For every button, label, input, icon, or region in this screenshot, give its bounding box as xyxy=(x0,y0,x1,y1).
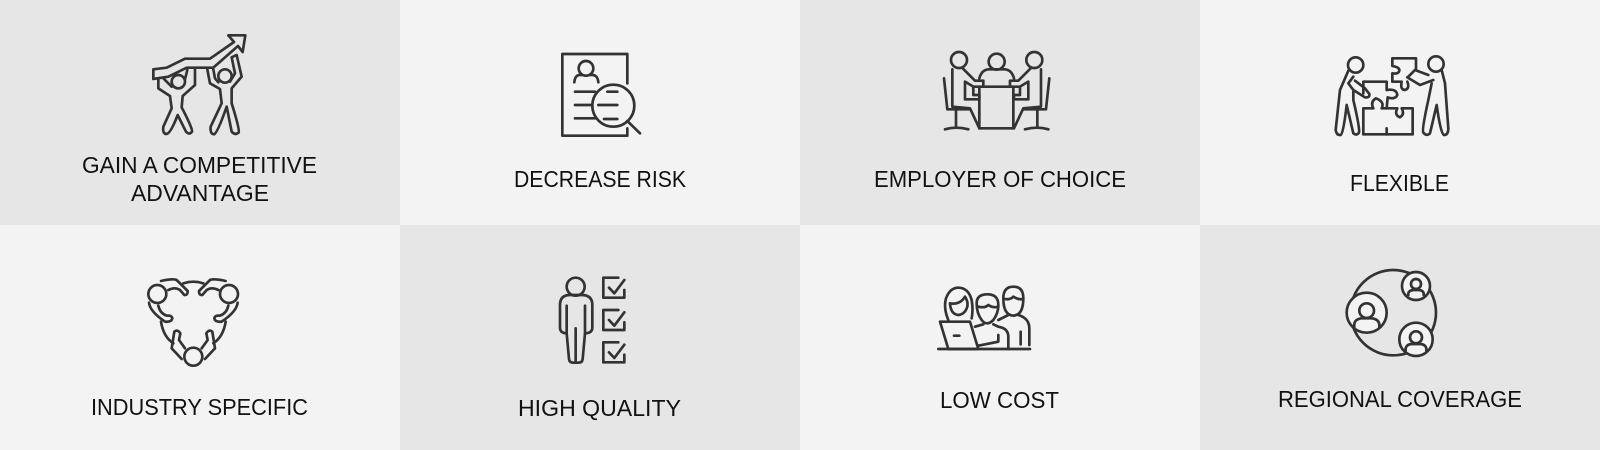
icon: document with magnifying glass xyxy=(562,54,640,136)
icon: three people meeting at a table xyxy=(944,52,1049,129)
panel: decrease risk xyxy=(400,0,800,225)
label: industry specific: INDUSTRY SPECIFIC xyxy=(91,394,308,420)
icon: three people around a circle, top view xyxy=(148,279,238,366)
panel: flexible xyxy=(1200,0,1600,225)
label: high quality: HIGH QUALITY xyxy=(518,395,681,421)
label: decrease risk: DECREASE RISK xyxy=(514,166,687,192)
panel: regional coverage xyxy=(1200,225,1600,450)
label: flexible: FLEXIBLE xyxy=(1350,170,1449,196)
panel: low cost xyxy=(800,225,1200,450)
panel: high quality xyxy=(400,225,800,450)
panel: employer of choice xyxy=(800,0,1200,225)
icon: connected people on a circle xyxy=(1347,270,1436,356)
label: gain a competitive advantage: ADVANTAGE xyxy=(131,180,269,206)
label: low cost: LOW COST xyxy=(940,387,1059,413)
icon: two people assembling puzzle xyxy=(1336,56,1448,135)
label: regional coverage: REGIONAL COVERAGE xyxy=(1278,386,1522,412)
icon: person with checklist xyxy=(560,278,624,363)
label: employer of choice: EMPLOYER OF CHOICE xyxy=(874,166,1126,192)
label: gain a competitive advantage: GAIN A COMPETITIVE xyxy=(82,152,317,178)
icon: three people with laptop xyxy=(938,287,1030,349)
icon: two people lifting rising arrow xyxy=(153,35,245,134)
label: gain a competitive advantage xyxy=(82,152,317,206)
panel: industry specific xyxy=(0,225,400,450)
panel: gain a competitive advantage xyxy=(0,0,400,225)
